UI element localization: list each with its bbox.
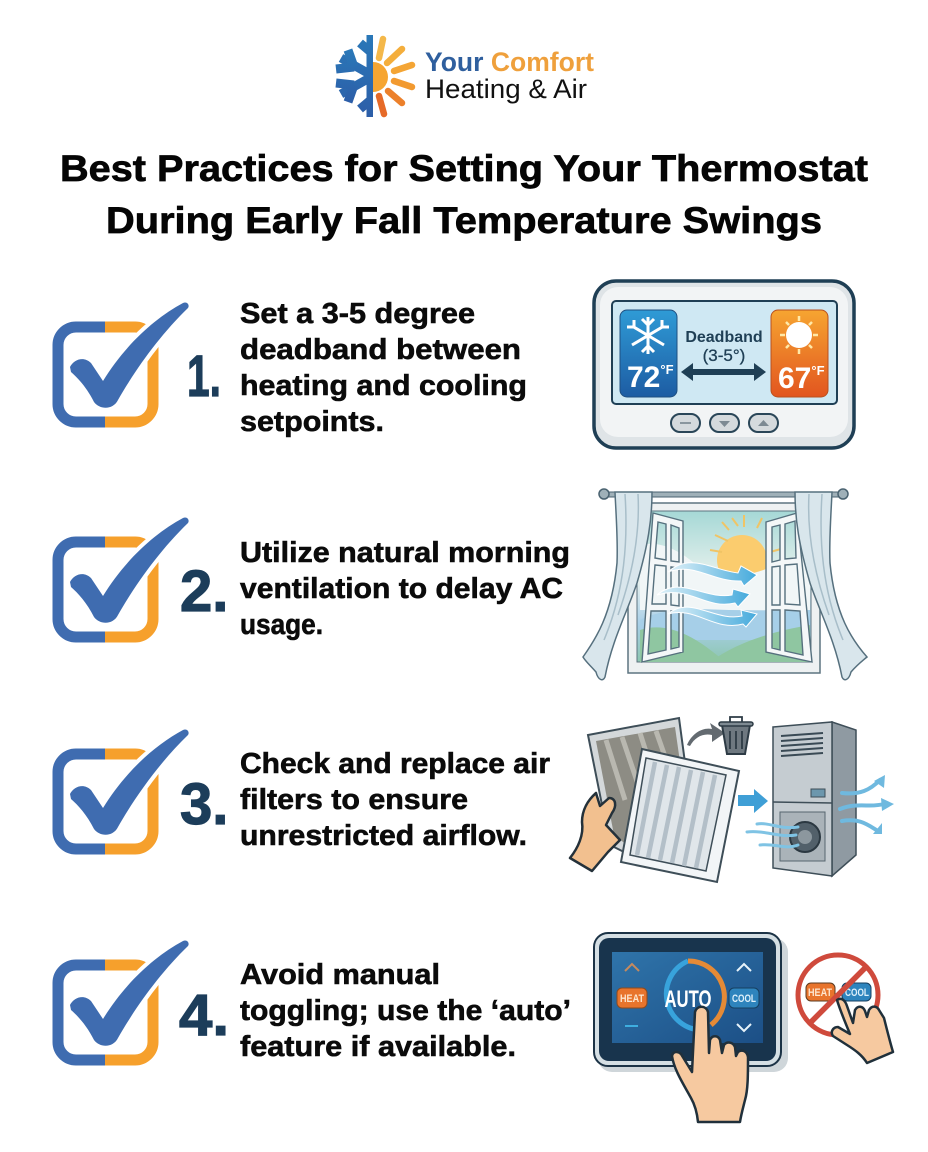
icon: checkbox 1 [58, 302, 189, 422]
heat panel: 67 [778, 362, 811, 395]
curtain rod [599, 489, 848, 499]
cool panel [620, 310, 677, 397]
logo [336, 35, 594, 117]
heat button small: HEAT [808, 987, 832, 999]
cool button: COOL [732, 993, 756, 1005]
cool button [729, 988, 759, 1008]
logo text: Your Comfort [425, 47, 594, 77]
text: tip 1: heating and cooling [240, 370, 527, 402]
text: tip 1: deadband between [240, 334, 521, 366]
icon: checkbox 2 [58, 517, 189, 637]
number 3: 3. [180, 772, 228, 837]
icon: snowflake and sun [336, 35, 412, 117]
deadband label: (3-5°) [703, 346, 745, 365]
text: tip 2: ventilation to delay AC [240, 573, 563, 605]
illustration: filter replacement and air handler [570, 717, 894, 882]
window frame and view [628, 503, 820, 673]
cool panel: °F [660, 362, 674, 377]
text: tip 3 [240, 748, 550, 852]
heat panel: °F [811, 363, 825, 378]
buttons [671, 414, 778, 432]
heat button: HEAT [620, 993, 644, 1005]
title: Best Practices for Setting Your Thermostat [60, 148, 868, 189]
arrow: to trash [687, 723, 725, 746]
text: tip 4: toggling; use the ‘auto’ [240, 995, 571, 1027]
logo text: Heating & Air [425, 74, 587, 104]
dirty filter [588, 718, 690, 860]
text: tip 4: Avoid manual [240, 959, 440, 991]
text: tip 3: filters to ensure [240, 784, 468, 816]
left curtain [583, 492, 652, 680]
heat button [617, 988, 647, 1008]
right sash [766, 513, 812, 662]
illustration: no manual toggling [798, 955, 893, 1063]
deadband label [685, 329, 763, 365]
left sash [642, 513, 683, 662]
new filter [621, 749, 739, 882]
title: During Early Fall Temperature Swings [106, 200, 822, 241]
number 1: 1. [187, 344, 221, 409]
cool button small: COOL [845, 987, 869, 999]
text: tip 1: Set a 3-5 degree [240, 298, 475, 330]
prohibition sign [798, 955, 878, 1035]
logo text [425, 47, 594, 104]
right curtain [795, 492, 867, 680]
illustration: open window with breeze [583, 489, 867, 680]
hand holding filter [570, 793, 620, 871]
airflow in [747, 824, 798, 847]
text: tip 2: Utilize natural morning [240, 537, 570, 569]
text: tip 3: Check and replace air [240, 748, 550, 780]
text: tip 1 [240, 298, 527, 438]
illustration: auto mode touchscreen [594, 933, 788, 1122]
heat panel [771, 310, 828, 397]
arrowheads [873, 775, 894, 834]
hand pressing cool [832, 999, 893, 1063]
item 1 [58, 298, 527, 438]
arrow: deadband [681, 363, 766, 381]
title [60, 148, 868, 241]
icon: checkbox 4 [58, 940, 189, 1060]
breeze arrows [657, 563, 757, 627]
text: tip 2: usage. [240, 609, 323, 641]
arrow: to unit [738, 789, 768, 813]
dial [666, 961, 724, 1030]
chevrons [625, 964, 751, 1031]
text: tip 4: feature if available. [240, 1031, 516, 1063]
item 3 [58, 729, 550, 852]
airflow out [840, 780, 884, 831]
auto label: AUTO [664, 986, 712, 1013]
text: tip 2 [240, 537, 570, 641]
air handler unit [773, 722, 856, 876]
number 4: 4. [179, 983, 229, 1048]
deadband label: Deadband [685, 329, 763, 346]
text: tip 4 [240, 959, 571, 1063]
cool panel: 72 [627, 361, 660, 394]
number 2: 2. [180, 559, 228, 624]
item 2 [58, 517, 570, 641]
text: tip 1: setpoints. [240, 406, 384, 438]
icon: checkbox 3 [58, 729, 189, 849]
hand pressing auto [672, 1007, 748, 1122]
item 4 [58, 940, 571, 1063]
icon: trash can [719, 717, 753, 754]
text: tip 3: unrestricted airflow. [240, 820, 527, 852]
illustration: thermostat with deadband [594, 281, 854, 448]
